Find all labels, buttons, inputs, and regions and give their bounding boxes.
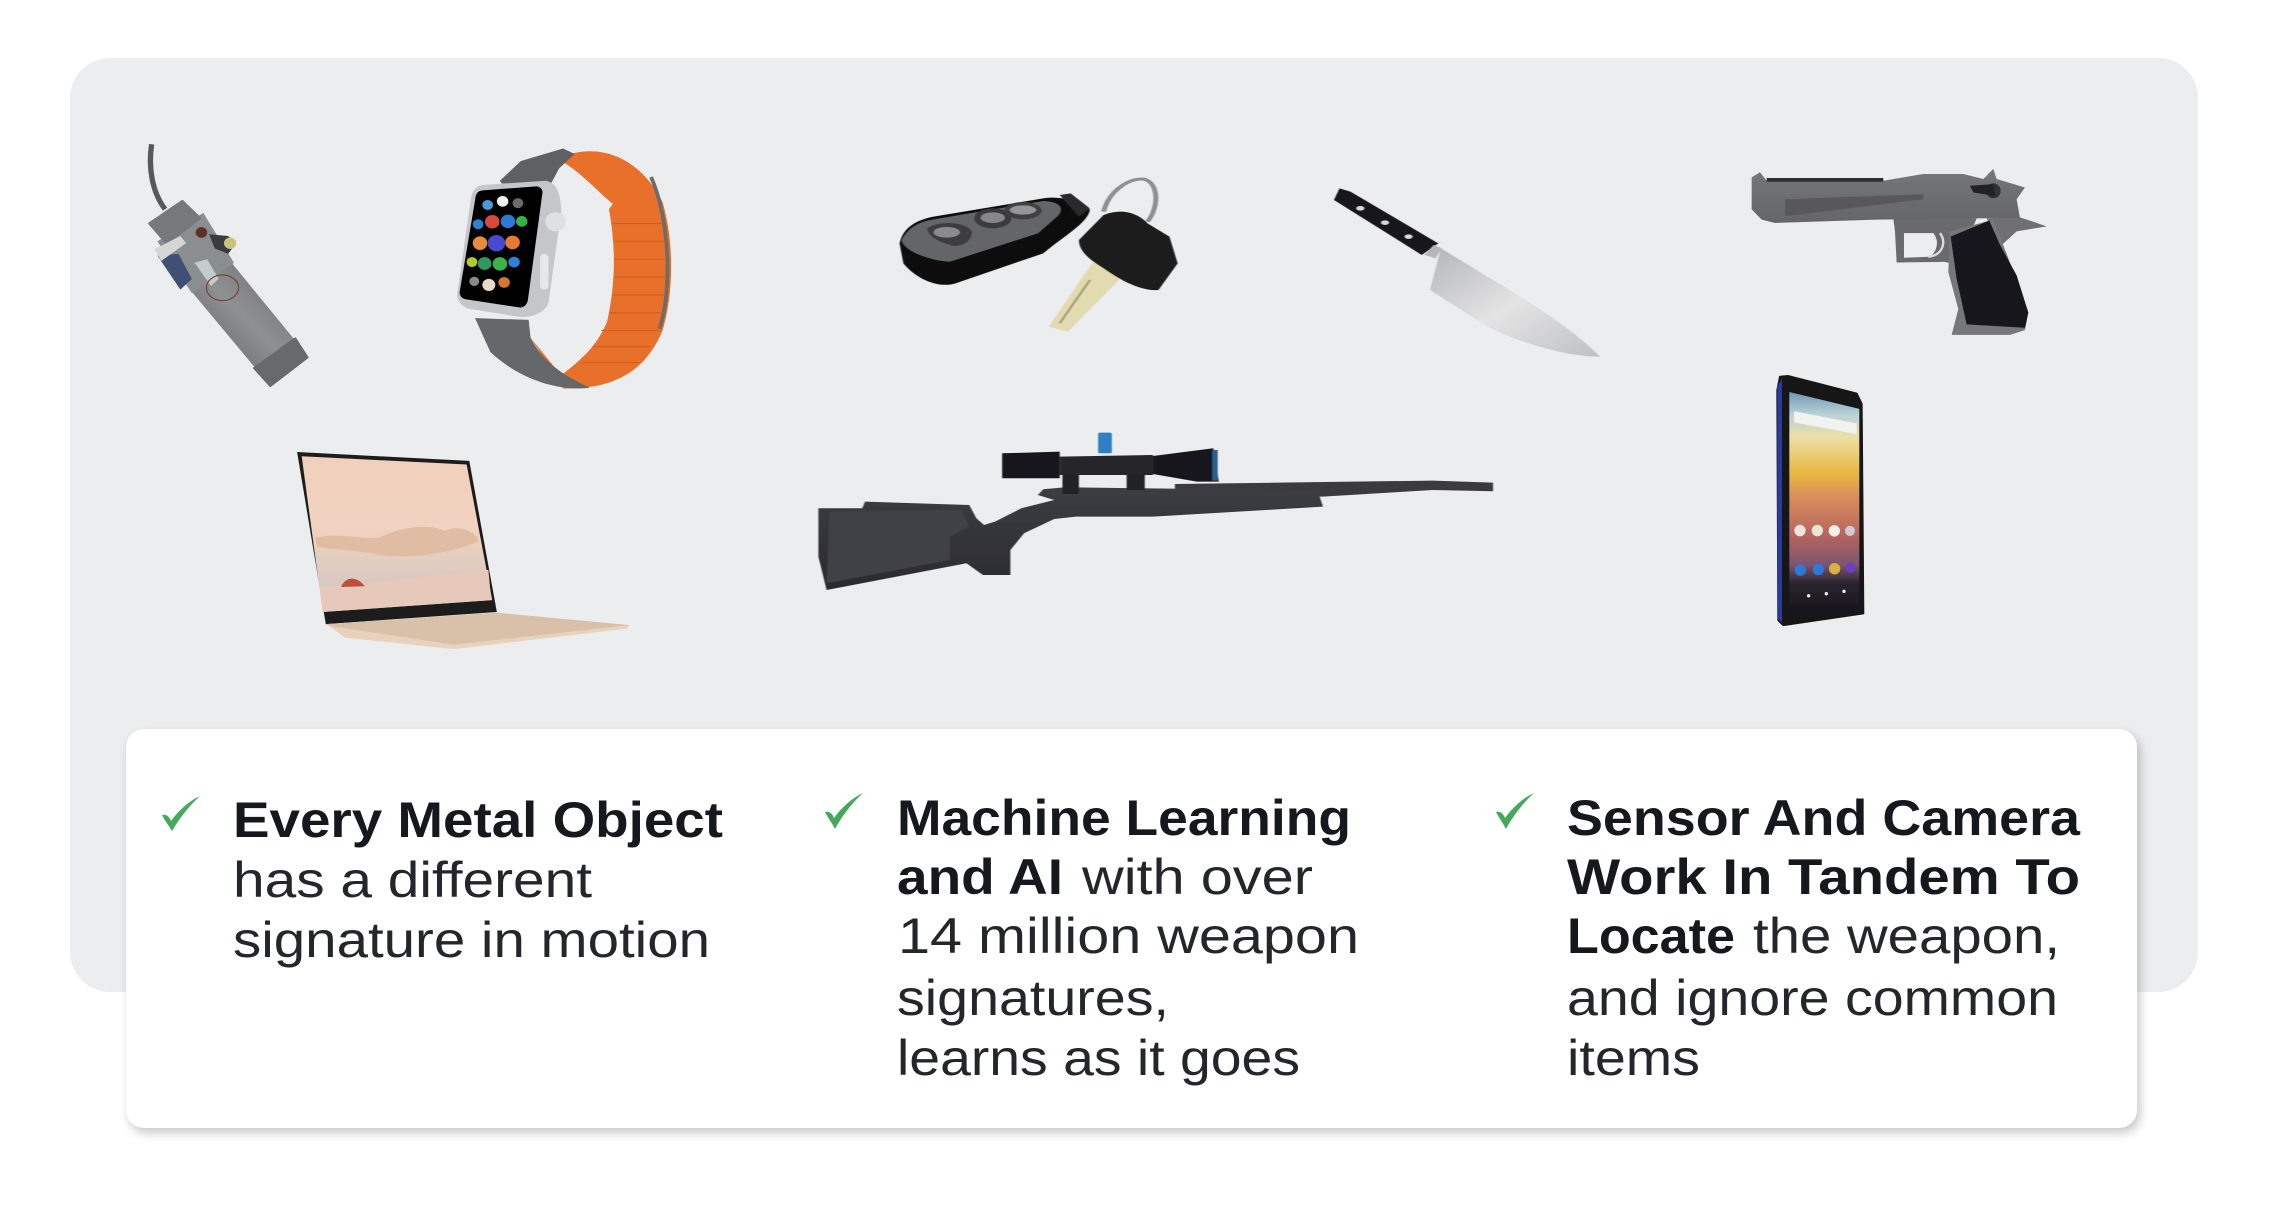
- text block: machine learning: [897, 790, 1359, 1086]
- text block: sensor and camera: the weapon,: [1753, 908, 2060, 964]
- text block: every metal object: [233, 792, 723, 968]
- text block: machine learning: with over: [1081, 849, 1313, 905]
- text block: every metal object: has a different: [233, 852, 592, 908]
- icon: kitchen knife: [1334, 188, 1600, 357]
- text block: machine learning: Machine Learning: [897, 790, 1351, 846]
- panel: text card: [126, 729, 2137, 1128]
- icon: check mark 1: [162, 796, 200, 831]
- panel: objects background: [70, 58, 2198, 992]
- icon: check mark 3: [1496, 793, 1534, 829]
- icon: smart watch: [457, 149, 671, 388]
- text block: machine learning: 14 million weapon: [898, 908, 1359, 964]
- icon: car key and fob: [900, 179, 1178, 332]
- icon: check mark 2: [825, 793, 863, 829]
- text block: every metal object: signature in motion: [233, 912, 710, 968]
- text block: sensor and camera: [1567, 790, 2081, 1086]
- text block: sensor and camera: Work In Tandem To: [1567, 849, 2080, 905]
- icon: smartphone: [1777, 376, 1863, 625]
- icon: pipe bomb: [150, 144, 307, 386]
- icon: laptop: [297, 452, 630, 649]
- text block: machine learning: and AI: [897, 849, 1063, 905]
- text block: machine learning: learns as it goes: [897, 1030, 1300, 1086]
- text block: every metal object: Every Metal Object: [233, 792, 723, 848]
- icon: scoped rifle: [818, 433, 1493, 590]
- text block: sensor and camera: Locate: [1567, 908, 1735, 964]
- text block: sensor and camera: Sensor And Camera: [1567, 790, 2081, 846]
- text block: sensor and camera: and ignore common: [1567, 970, 2058, 1026]
- text block: machine learning: signatures,: [897, 970, 1169, 1026]
- icon: pistol: [1752, 169, 2047, 335]
- text block: sensor and camera: items: [1567, 1030, 1700, 1086]
